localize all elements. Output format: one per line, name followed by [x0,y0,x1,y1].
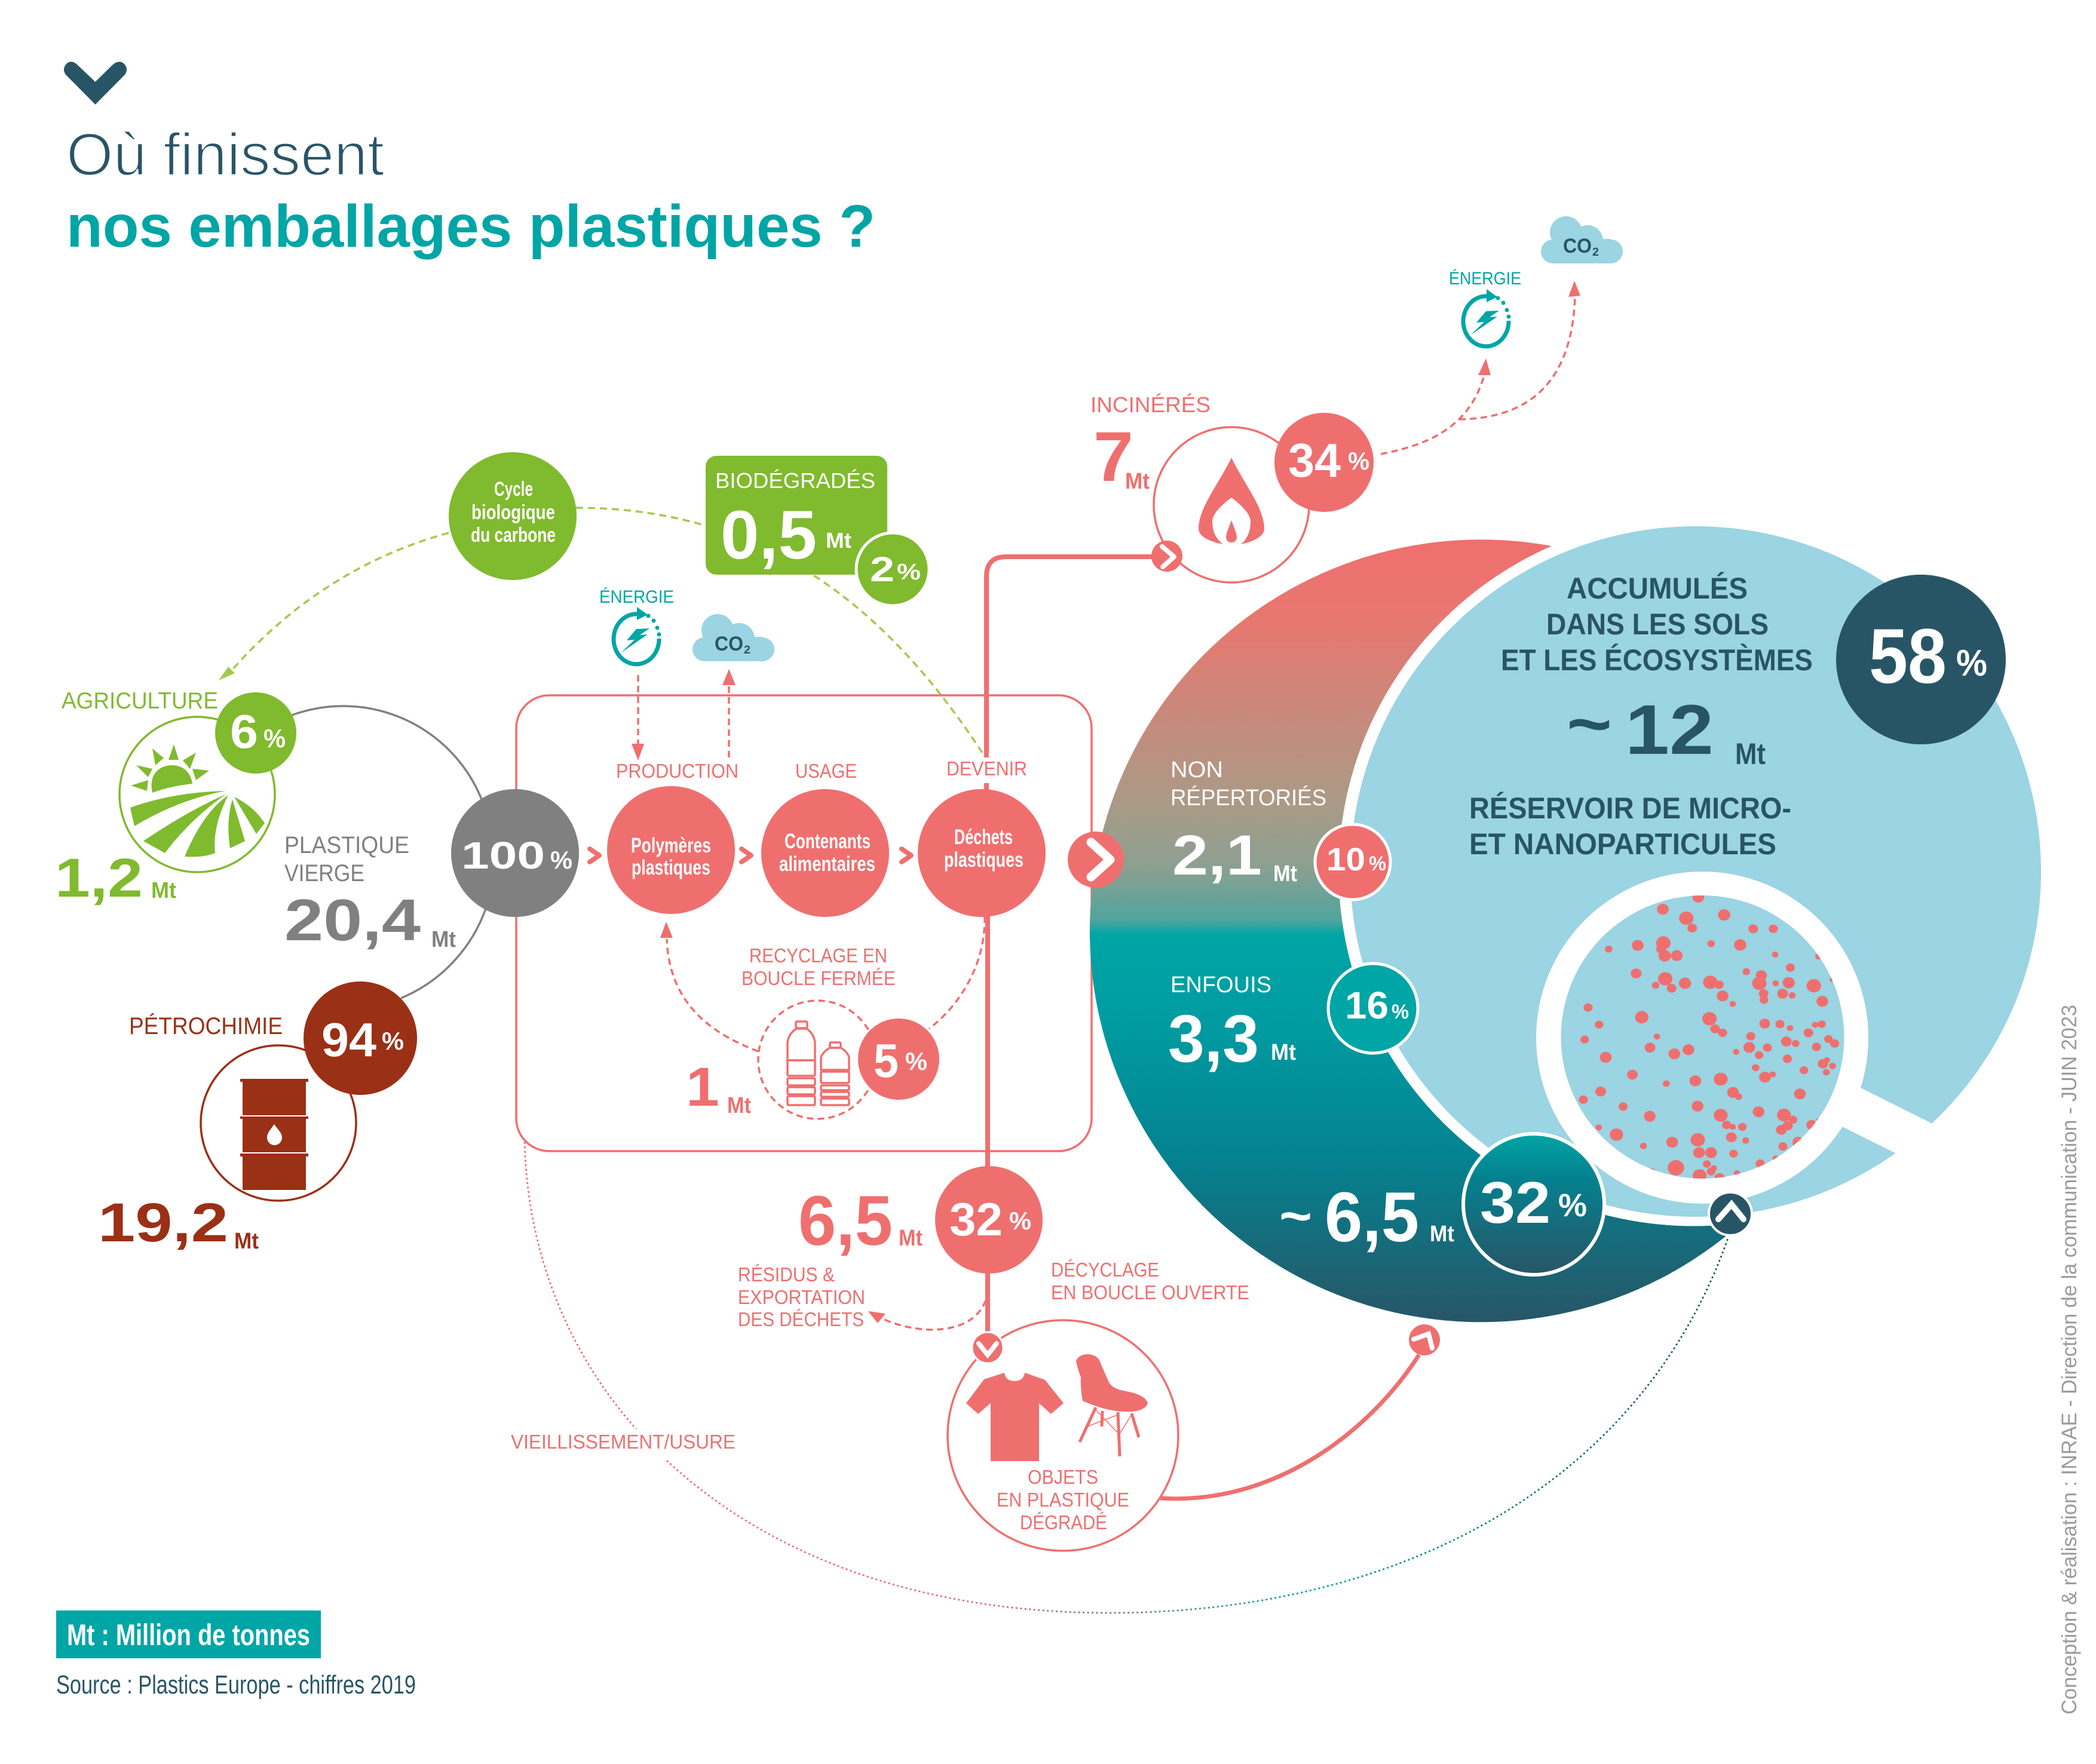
icon: CO2 cloud left: CO [715,633,743,655]
dotted curve: vieillissement usure [525,1143,1729,1613]
arrows: incinération dashed [1381,281,1580,454]
text block: 6,5 Mt crescent [1279,1178,1454,1257]
icon: energy [614,607,661,664]
step: devenir: Déchets [954,826,1013,849]
text block: non répertoriés [1170,757,1326,887]
label: vieillissement: VIEILLISSEMENT/USURE [511,1431,736,1453]
icon: big chevron [1068,832,1124,888]
panel: objets en plastique dégradé: EN PLASTIQUE [997,1489,1129,1511]
panel: 32 percent résidus et décyclage: DES DÉCHETS [738,1308,864,1330]
icon: CO2 cloud left [692,614,774,661]
icon: CO2 cloud right [1541,216,1623,263]
icon: chevron on arrow [1409,1324,1440,1355]
icon: flame [1199,458,1264,544]
panel: cycle biologique du carbone: du carbone [471,524,556,547]
panel: 32 percent résidus et décyclage: 6,5 [798,1182,893,1260]
step: production: PRODUCTION [616,760,738,782]
panel: pétrochimie: 19,2 [98,1192,228,1253]
text block: plastique vierge: 20,4 [284,887,421,953]
panel: 32 percent résidus et décyclage: EN BOUCLE OUVERTE [1051,1281,1249,1303]
badge: 58 percent: 58 [1869,612,1947,700]
icon: chevron incinération [1151,541,1182,572]
panel: 100 percent: % [550,846,572,874]
title: Où finissent [66,121,384,188]
step: usage [761,760,889,917]
panel: agriculture [55,688,296,909]
icon: CO2 cloud right: CO [1563,235,1592,257]
step: devenir: plastiques [944,848,1024,872]
badge: 32 percent crescent [1463,1134,1604,1275]
panel: recyclage en boucle fermée [660,916,985,1119]
step: production: Polymères [631,834,711,857]
grey arcs: plastique vierge [292,706,486,998]
panel: agriculture: 6 [230,705,258,758]
panel: biodégradés: 2 [870,550,894,589]
badge: 58 percent: % [1956,643,1987,684]
chart: gradient crescent [1090,539,1742,1322]
step: production [607,760,738,914]
badge: 16 percent [1328,964,1418,1053]
step: production: plastiques [632,856,710,879]
text block: 6,5 Mt crescent: 6,5 [1325,1178,1419,1257]
panel: pétrochimie: % [382,1027,404,1055]
text block: accumulés: Mt [1735,737,1766,771]
source: Source : Plastics Europe - chiffres 2019 [56,1670,416,1699]
panel: 32 percent résidus et décyclage: RÉSIDUS & [738,1263,835,1286]
panel: énergie incinération: ÉNERGIE [1449,269,1521,289]
text block: accumulés: ET NANOPARTICULES [1469,827,1776,861]
text block: enfouis: Mt [1271,1040,1296,1065]
green dashed curves: biological carbon cycle [219,508,983,754]
icon: magnifier with microparticles [1536,872,1972,1204]
arrows between steps [590,849,911,862]
panel: recyclage en boucle fermée: % [905,1047,927,1075]
text block: 6,5 Mt crescent: Mt [1430,1222,1454,1247]
panel: 32 percent résidus et décyclage [738,1166,1249,1330]
panel: 100 percent: 100 [461,834,545,877]
legend: Mt unit: Mt : Million de tonnes [67,1618,310,1652]
badge: 10 percent: % [1369,852,1386,875]
icon: chair [1076,1354,1148,1456]
icon: sun over fields [130,744,265,857]
icon: bottles [787,1021,849,1105]
icon: t-shirt [966,1373,1064,1461]
icon: chevron up on crescent [1709,1192,1752,1235]
panel: incinérés: Mt [1125,469,1150,494]
panel: biodégradés: 0,5 [721,497,817,573]
panel: cycle biologique du carbone: Cycle [494,478,533,501]
legend: Mt unit [56,1610,321,1658]
icon: energy right [1463,289,1510,346]
credit vertical: Conception & réalisation : INRAE - Direction de la communication - JUIN 2023 [2058,1005,2081,1714]
panel: biodégradés: BIODÉGRADÉS [715,468,875,493]
panel: recyclage en boucle fermée: 5 [874,1034,899,1087]
panel: pétrochimie [98,981,417,1254]
text block: accumulés: ET LES ÉCOSYSTÈMES [1501,643,1813,677]
badge: 10 percent: 10 [1326,842,1365,878]
text block: non répertoriés: 2,1 [1172,824,1262,887]
panel: 32 percent résidus et décyclage: EXPORTATION [738,1286,865,1308]
title [66,121,875,260]
icon: CO2 cloud right: 2 [1592,246,1599,259]
title: nos emballages plastiques ? [66,193,875,260]
panel: incinérés: % [1348,447,1369,475]
icon: oil barrel [240,1079,308,1190]
panel: incinérés [1090,392,1374,582]
panel: recyclage en boucle fermée: BOUCLE FERMÉE [741,967,896,989]
arrow: objets to crescent [1160,1355,1419,1499]
text block: plastique vierge: PLASTIQUE [284,832,409,858]
panel: recyclage en boucle fermée: 1 [686,1057,719,1118]
panel: pétrochimie: PÉTROCHIMIE [129,1013,283,1039]
panel: énergie incinération [1449,269,1521,346]
panel: agriculture: 1,2 [55,848,143,909]
panel: agriculture: Mt [151,878,176,903]
text block: 6,5 Mt crescent: ~ [1279,1186,1312,1246]
panel: process frame [516,695,1092,1151]
panel: pétrochimie: 94 [321,1013,377,1066]
panel: recyclage en boucle fermée: RECYCLAGE EN [749,944,887,967]
panel: cycle biologique du carbone: biologique [471,501,555,524]
panel: objets en plastique dégradé: OBJETS [1028,1466,1098,1488]
step: devenir [918,757,1046,917]
text block: enfouis: 3,3 [1168,1001,1259,1076]
panel: objets en plastique dégradé: DÉGRADÉ [1020,1511,1107,1533]
text block: plastique vierge [284,832,456,953]
text block: accumulés: ACCUMULÉS [1567,572,1748,605]
badge: 10 percent [1315,824,1390,900]
icon: chevron down [972,1332,1003,1363]
panel: biodégradés: % [897,560,921,585]
text block: enfouis [1168,972,1296,1076]
text block: enfouis: ENFOUIS [1170,972,1271,998]
badge: 32 percent crescent: % [1558,1188,1587,1223]
chart: accumulated blue circle [1350,526,2041,1217]
panel: cycle biologique du carbone [449,452,577,580]
icon: chevron top [64,62,127,105]
panel: incinérés: INCINÉRÉS [1090,392,1211,417]
thick line: déchets to résidus [986,783,988,1348]
panel: incinérés: 34 [1288,434,1341,487]
text block: non répertoriés: NON [1170,757,1223,783]
icon: CO2 cloud left: 2 [744,644,750,656]
text block: non répertoriés: Mt [1273,861,1297,886]
text block: non répertoriés: RÉPERTORIÉS [1170,785,1326,811]
panel: pétrochimie: Mt [234,1229,259,1254]
step: usage: Contenants [785,830,871,853]
step: usage: USAGE [795,760,857,782]
panel: agriculture: AGRICULTURE [62,688,218,714]
badge: 32 percent crescent: 32 [1480,1170,1550,1235]
panel: objets en plastique dégradé [948,1320,1178,1551]
badge: 16 percent: % [1392,1001,1409,1023]
panel: 32 percent résidus et décyclage: Mt [899,1226,923,1251]
text block: accumulés: RÉSERVOIR DE MICRO- [1469,792,1791,825]
text block: plastique vierge: VIERGE [284,860,364,886]
panel: énergie production: ÉNERGIE [599,587,674,607]
panel: 32 percent résidus et décyclage: % [1009,1207,1031,1235]
panel: 32 percent résidus et décyclage: DÉCYCLAGE [1051,1259,1159,1281]
thick line: déchets to incinération [986,557,1167,757]
text block: plastique vierge: Mt [431,927,456,952]
panel: agriculture: % [263,724,286,753]
panel: énergie production [599,587,674,664]
text block: accumulés: ~ [1567,685,1612,763]
panel: recyclage en boucle fermée: Mt [727,1093,751,1118]
badge: 16 percent: 16 [1345,984,1389,1027]
text block: accumulés: 12 [1625,691,1714,769]
badge: 58 percent [1836,575,2006,744]
step: usage: alimentaires [779,852,875,876]
panel: biodégradés [706,456,929,606]
panel: incinérés: 7 [1093,418,1133,496]
arrows: production dashed [632,669,736,760]
panel: 100 percent [451,789,579,917]
panel: 32 percent résidus et décyclage: 32 [949,1193,1003,1245]
text block: accumulés [1469,572,1813,861]
step: devenir: DEVENIR [946,757,1027,780]
panel: biodégradés: Mt [826,528,851,553]
text block: accumulés: DANS LES SOLS [1546,608,1769,641]
